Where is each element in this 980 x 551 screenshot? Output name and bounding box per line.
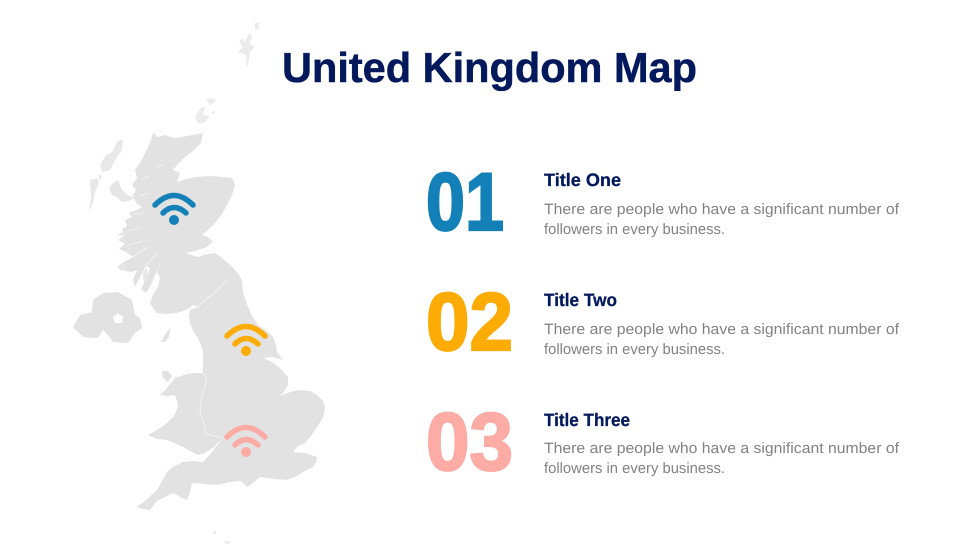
heading: Title Three: Title Three (544, 410, 630, 430)
map: Great Britain mainland (117, 133, 325, 510)
map: borders (198, 280, 227, 438)
map: Orkney (195, 98, 216, 124)
icon: wifi pink (227, 428, 265, 457)
text block 3: followers in every business. (544, 460, 725, 477)
item 01 (426, 157, 900, 248)
text block 1: followers in every business. (544, 221, 725, 238)
map: Skye and Hebrides (109, 180, 148, 284)
text block 2: followers in every business. (544, 341, 725, 358)
icon: wifi blue (155, 196, 193, 225)
text block 2: There are people who have a significant number of (544, 321, 900, 338)
heading: Title One: Title One (544, 170, 621, 190)
number 03: 03 (426, 397, 513, 488)
map: Shetland (238, 22, 259, 68)
map: Northern Ireland (73, 292, 142, 343)
item 02 (426, 277, 900, 368)
item 03 (426, 397, 900, 488)
number 01: 01 (426, 157, 504, 248)
map: Outer Hebrides (89, 139, 123, 211)
heading: Title Two: Title Two (544, 290, 617, 310)
text block 1: There are people who have a significant number of (544, 201, 900, 218)
title: United Kingdom Map (282, 44, 697, 91)
map: Isle of Man and Anglesey (161, 328, 172, 382)
map: Scottish sea lochs (123, 165, 184, 280)
text block 3: There are people who have a significant number of (544, 440, 900, 457)
map: United Kingdom (73, 22, 325, 544)
map: southern islets (213, 531, 230, 544)
icon: wifi orange (227, 326, 265, 356)
number 02: 02 (426, 277, 513, 368)
